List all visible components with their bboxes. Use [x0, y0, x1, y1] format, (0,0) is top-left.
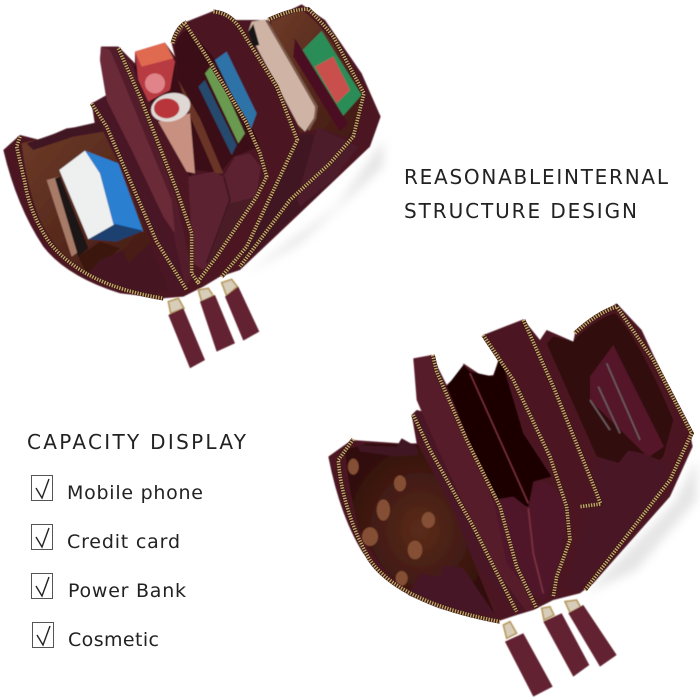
middle compartment — [175, 30, 261, 270]
wallet photo: open with contents — [3, 4, 383, 368]
tissue pack — [59, 151, 143, 242]
rear compartment — [547, 313, 673, 590]
wallet silhouette — [328, 303, 693, 622]
zippers — [17, 9, 364, 298]
wallet silhouette — [3, 4, 381, 298]
front interior — [133, 57, 197, 177]
heading: internal structure — [404, 165, 669, 223]
front panel — [92, 47, 193, 297]
credit cards — [198, 52, 257, 155]
checklist — [32, 476, 203, 651]
phone — [248, 19, 317, 132]
item: power bank — [32, 574, 186, 602]
left compartment — [345, 438, 495, 615]
left compartment — [22, 122, 170, 293]
item: cosmetic: Cosmetic — [68, 629, 159, 651]
heading: internal structure: REASONABLEINTERNAL — [404, 165, 669, 189]
item: credit card — [32, 524, 180, 553]
pocket flaps — [493, 482, 568, 600]
cosmetics — [135, 43, 195, 173]
zipper pulls — [168, 279, 259, 368]
rear compartment — [243, 10, 363, 263]
pocket flaps — [188, 153, 261, 270]
wallet photo: open and empty — [328, 303, 697, 697]
drop shadow — [247, 140, 383, 273]
front panel — [412, 355, 540, 613]
zippers — [338, 307, 692, 622]
item: cosmetic — [32, 622, 159, 651]
heading: capacity display: CAPACITY DISPLAY — [27, 430, 247, 454]
middle compartment — [447, 355, 568, 600]
item: credit card: Credit card — [67, 531, 180, 553]
drop shadow — [587, 460, 697, 593]
heading: internal structure: STRUCTURE DESIGN — [404, 199, 637, 223]
item: power bank: Power Bank — [68, 580, 186, 602]
item: mobile phone — [32, 476, 203, 504]
green gift card — [303, 31, 362, 116]
item: mobile phone: Mobile phone — [67, 482, 203, 504]
power bank — [47, 177, 83, 257]
zipper pulls — [503, 600, 617, 697]
